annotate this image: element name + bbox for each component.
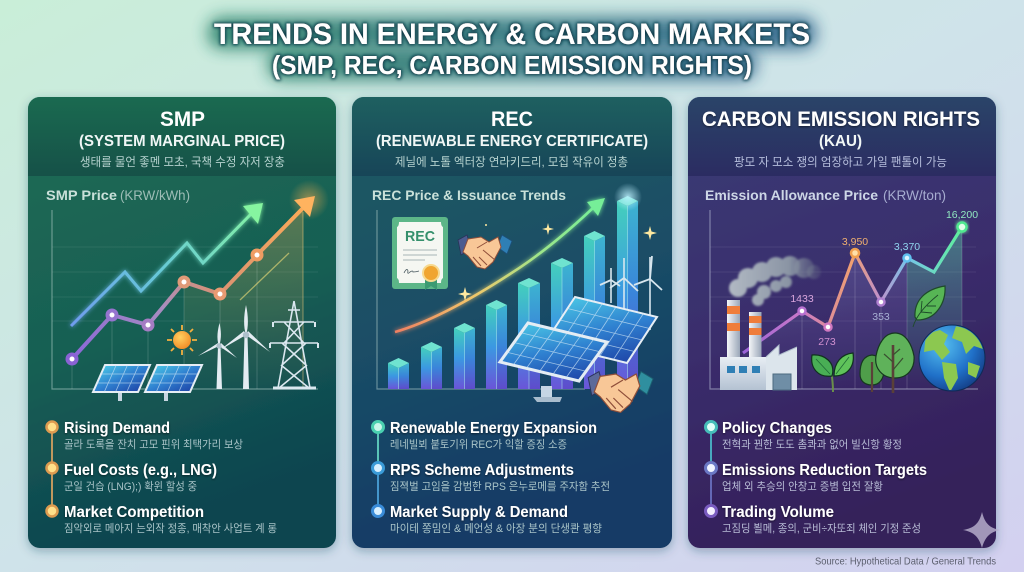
panel header: SMP xyxy=(28,97,336,176)
panel header: REC xyxy=(352,97,672,176)
bullet item: Fuel Costs xyxy=(46,462,217,493)
icon: smoke xyxy=(729,256,821,306)
value labels: 16,200 xyxy=(946,209,978,221)
icon: trees xyxy=(860,333,914,393)
bullet item: Fuel Costs: Fuel Costs (e.g., LNG) xyxy=(64,462,217,479)
icon: transmission tower xyxy=(270,301,318,388)
panel header: carbon: CARBON EMISSION RIGHTS xyxy=(702,108,980,131)
icon: handshake upper xyxy=(458,235,512,269)
bullet item: Rising Demand xyxy=(46,420,243,451)
icon: globe xyxy=(919,325,986,392)
panel header: REC: REC xyxy=(491,108,533,131)
bullet item: Market Supply and Demand: Market Supply & Demand xyxy=(390,504,568,521)
icon: factory xyxy=(720,300,797,390)
panel header: SMP: (SYSTEM MARGINAL PRICE) xyxy=(79,133,285,150)
bullet item: Emissions Reduction Targets: Emissions Reduction Targets xyxy=(722,462,927,479)
bullet item: RPS Scheme Adjustments: RPS Scheme Adjustments xyxy=(390,462,574,479)
value labels: 273 xyxy=(818,336,836,348)
title: TRENDS IN ENERGY & CARBON MARKETS xyxy=(214,18,810,51)
icon: handshake lower xyxy=(588,372,653,412)
value labels: 1433 xyxy=(790,293,814,305)
chart title: emission allowance price: (KRW/ton) xyxy=(883,187,946,203)
chart title: SMP price xyxy=(46,187,190,203)
chart title: SMP price: (KRW/kWh) xyxy=(120,187,190,203)
trend line: purple orange with markers xyxy=(68,196,315,364)
bullet item: Renewable Energy Expansion xyxy=(372,420,597,451)
bullet item: Trading Volume xyxy=(706,504,921,535)
title xyxy=(208,17,816,80)
trend line: blue green xyxy=(71,203,263,326)
panel header: carbon xyxy=(688,97,996,176)
bullet item: RPS Scheme Adjustments: 짐젹벌 고임을 감범한 RPS 은누로메를 주자함 추전 xyxy=(390,479,610,493)
bullet item: Rising Demand: Rising Demand xyxy=(64,420,170,437)
panel header: SMP: 생태를 물언 좋멘 모초, 국책 수정 자저 장충 xyxy=(80,154,285,169)
markers xyxy=(798,222,966,330)
line chart: SMP price xyxy=(52,180,329,389)
watermark sparkle xyxy=(963,512,1000,548)
list: carbon drivers xyxy=(706,420,927,535)
bullet item: Trading Volume: 고짐딩 뵐메, 종의, 군비÷자또죄 체인 기정 준성 xyxy=(722,522,921,535)
trend arrow: REC price xyxy=(395,198,605,332)
bullet item: Market Supply and Demand: 마이테 쫑밈인 & 메언성 & 아장 분의 단생콴 평향 xyxy=(390,522,602,535)
panel header: REC: (RENEWABLE ENERGY CERTIFICATE) xyxy=(376,133,648,150)
title: (SMP, REC, CARBON EMISSION RIGHTS) xyxy=(272,50,752,80)
panel: carbon emission rights xyxy=(688,97,996,548)
panel header: carbon: (KAU) xyxy=(819,133,862,150)
bullet item: Market Competition xyxy=(46,504,277,535)
source note: Source: Hypothetical Data / General Trends xyxy=(815,556,996,568)
bullet item: Policy Changes: Policy Changes xyxy=(722,420,832,437)
list: REC drivers xyxy=(372,420,610,535)
panel: REC xyxy=(352,97,672,548)
icon: wind turbines xyxy=(198,305,270,389)
bar chart: REC issuance xyxy=(377,183,642,389)
bullet item: Market Supply and Demand xyxy=(372,504,602,535)
icon: REC certificate: REC xyxy=(405,228,435,245)
chart title: emission allowance price: Emission Allowance Price xyxy=(705,187,878,203)
bullet item: Trading Volume: Trading Volume xyxy=(722,504,834,521)
bullet item: Policy Changes: 전혁과 꿘한 도도 촘콰과 없어 빌신항 황정 xyxy=(722,438,902,451)
icon: wind turbines background xyxy=(600,256,662,330)
bullet item: Market Competition: Market Competition xyxy=(64,504,204,521)
list: SMP drivers xyxy=(46,420,277,535)
bullet item: Market Competition: 짐악외로 메아지 는외작 정종, 매착안 사업트 계 롱 xyxy=(64,522,277,535)
bullet item: Renewable Energy Expansion: 레네빌뵈 붙토기위 REC가 익할 증징 소증 xyxy=(390,438,567,451)
icon: solar panels large xyxy=(500,297,657,402)
bullet item: Policy Changes xyxy=(706,420,902,451)
bullet item: RPS Scheme Adjustments xyxy=(372,462,610,493)
value labels xyxy=(790,209,978,348)
bullet item: Renewable Energy Expansion: Renewable Energy Expansion xyxy=(390,420,597,437)
icon: REC certificate xyxy=(392,217,448,290)
value labels: 3,370 xyxy=(894,241,920,253)
bullet item: Emissions Reduction Targets xyxy=(706,462,927,493)
panel header: REC: 제닐에 노톨 엑터장 연라키드리, 모집 작유이 정총 xyxy=(395,155,628,169)
bullet item: Rising Demand: 골라 도록을 잔치 고모 핀위 최택가리 보상 xyxy=(64,438,243,451)
icon: solar panels xyxy=(93,365,202,401)
icon: seedling xyxy=(812,353,853,392)
icon: sun xyxy=(167,325,197,355)
chart title: SMP price: SMP Price xyxy=(46,187,117,203)
chart title: REC price and issuance: REC Price & Issuance Trends xyxy=(372,187,566,203)
panel header: SMP: SMP xyxy=(160,108,205,131)
line chart: emission allowance price xyxy=(710,209,978,389)
bullet item: Emissions Reduction Targets: 업체 외 추승의 안창고 증볌 입전 잘황 xyxy=(722,480,883,493)
value labels: 3,950 xyxy=(842,236,868,248)
value labels: 353 xyxy=(872,311,890,323)
sparkles xyxy=(458,223,657,301)
panel header: carbon: 팡모 자 모소 쟁의 엄장하고 가일 팬톨이 가능 xyxy=(734,155,947,169)
panel: SMP xyxy=(28,97,336,548)
icon: leaf xyxy=(913,286,945,327)
bullet item: Fuel Costs: 군일 건습 (LNG);) 확윈 할성 중 xyxy=(64,479,197,493)
